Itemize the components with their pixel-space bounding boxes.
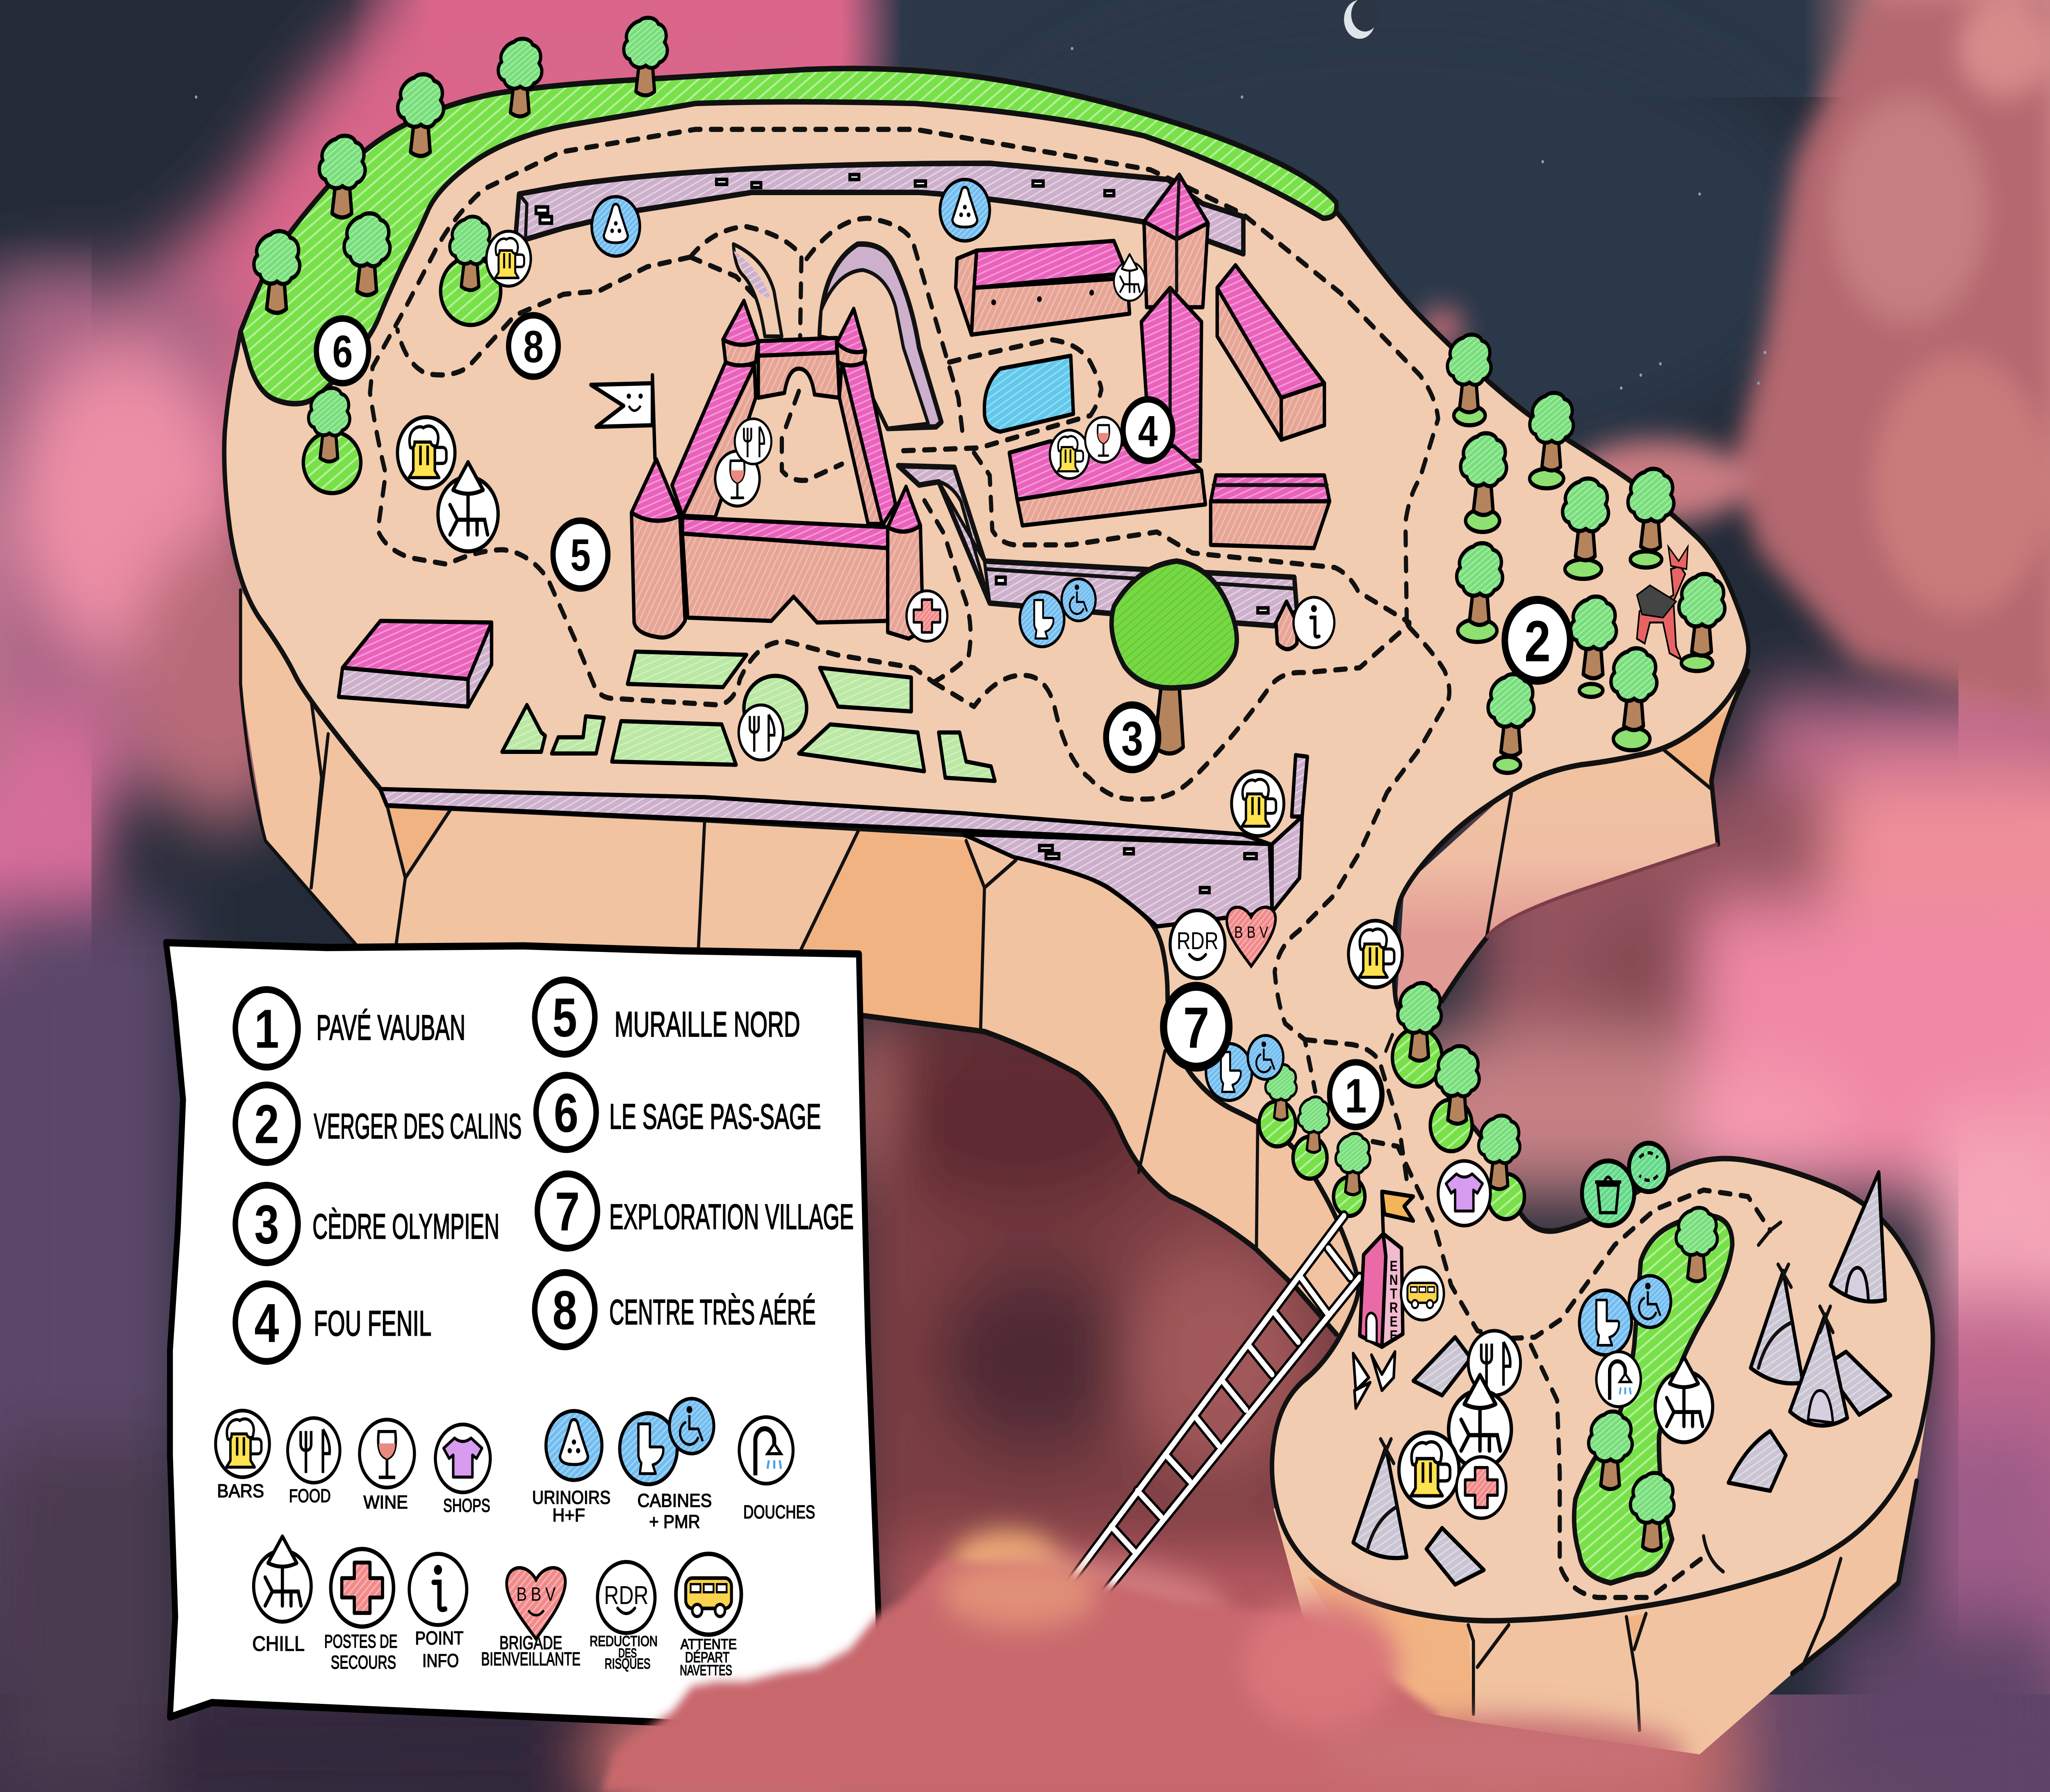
legend entry 7: EXPLORATION VILLAGE: [609, 1197, 854, 1236]
cliff: outline: [861, 1016, 1336, 1334]
legend entry 7: 7: [555, 1181, 580, 1242]
lower island green blob: [1574, 1216, 1732, 1583]
legend icon: urinals: URINOIRS: [532, 1487, 610, 1508]
legend icon: BBV: BIENVEILLANTE: [481, 1649, 581, 1669]
curved wall right: [820, 244, 941, 428]
stars: [195, 47, 1766, 389]
map marker 3: [1106, 705, 1158, 770]
legend entry 6: [536, 1075, 821, 1150]
legend icon: BBV: BBV: [517, 1584, 556, 1605]
foreground clouds bottom centre: [941, 1557, 1687, 1792]
map icon: accessible camp: [1629, 1276, 1671, 1327]
map marker 2: [1505, 600, 1570, 681]
legend entry 6: LE SAGE PAS-SAGE: [609, 1097, 821, 1136]
legend icon: food: FOOD: [289, 1485, 331, 1506]
ladder: [1068, 1216, 1360, 1604]
legend icon: shuttle: [676, 1554, 741, 1678]
orchard trees: [1447, 335, 1725, 773]
legend icon: info: POINT: [415, 1628, 463, 1649]
map icon: beer south wall: [1232, 771, 1284, 836]
map icon: chill west: [438, 462, 498, 551]
legend icon: showers: DOUCHES: [743, 1502, 815, 1522]
legend icon: RDR: DES: [618, 1646, 637, 1660]
curved wall left: [733, 244, 782, 336]
legend entry 2: VERGER DES CALINS: [314, 1106, 522, 1146]
legend entry 1: 1: [254, 998, 279, 1059]
cliff: lower island: [1273, 1374, 1932, 1754]
map marker 8: [508, 315, 558, 377]
legend icon: cabins and accessible: CABINES: [638, 1490, 712, 1511]
map marker 1: 1: [1345, 1069, 1367, 1123]
background: sky lighter tone right: [941, 8, 1830, 477]
map icon: BBV heart: BBV: [1234, 923, 1268, 941]
entrance label: R: [1389, 1300, 1398, 1316]
map icon: chill camp: [1449, 1375, 1511, 1468]
map icon: beer camp: [1399, 1432, 1459, 1507]
castle flag: [591, 375, 655, 459]
foreground cloud covering the legend corner: [601, 1560, 1438, 1792]
legend entry 8: 8: [552, 1280, 577, 1341]
background: bright cloud detail: [615, 0, 2050, 1790]
legend entry 1: PAVÉ VAUBAN: [317, 1008, 465, 1047]
map icon: beer west: [397, 417, 455, 488]
map icon: wine castle: [715, 451, 760, 506]
map icon: recycling: [1629, 1143, 1668, 1192]
barn: long building: [956, 241, 1130, 335]
map marker 2: 2: [1524, 609, 1551, 674]
tipi north-east: [1830, 1172, 1885, 1302]
tent small east: [1729, 1431, 1786, 1491]
cliff: right side of orchard: [1396, 671, 1748, 1011]
legend entry 2: 2: [254, 1093, 279, 1155]
legend icon: urinals: H+F: [552, 1505, 585, 1526]
map icon: shower camp: [1596, 1352, 1641, 1407]
wall bricks: [536, 175, 1114, 223]
legend icon: chill: [252, 1536, 311, 1655]
island top surface: [224, 68, 1933, 1621]
map icon: wine farm: [1085, 417, 1122, 462]
small tower near info: [1276, 601, 1297, 649]
back right tower: [837, 309, 866, 352]
tent south-west: [1426, 1528, 1484, 1585]
gardens: [502, 651, 995, 781]
map icon: first aid castle: [907, 591, 948, 641]
legend icon: shops: SHOPS: [443, 1495, 490, 1516]
legend sheet: [166, 943, 879, 1738]
legend entry 5: 5: [552, 987, 577, 1048]
legend entry 7: [538, 1174, 854, 1248]
barn: tall tower: [1144, 175, 1208, 307]
legend icon: first aid: SECOURS: [331, 1652, 396, 1673]
dashed paths: outer loop and alleys: [370, 130, 1781, 1598]
map icon: first aid camp: [1456, 1457, 1506, 1518]
legend icon: chill: CHILL: [252, 1632, 305, 1655]
panel: legend: [166, 943, 879, 1738]
map icon: info: [1294, 597, 1334, 648]
green hillside band: [241, 68, 1337, 404]
entrance label: E: [1390, 1314, 1398, 1330]
cliff: main island: [241, 590, 1362, 1358]
map icon: BBV heart: [1227, 907, 1276, 966]
map marker 7: 7: [1183, 995, 1210, 1060]
map marker 1: [1330, 1062, 1382, 1127]
map icon: shuttle stop: [1401, 1267, 1444, 1320]
legend icon: wine: [360, 1420, 415, 1513]
legend entry 6: 6: [554, 1082, 579, 1143]
map icon: chill farm: [1114, 254, 1145, 301]
map icon: accessible wall: [1061, 579, 1096, 621]
legend icon: shuttle: DÉPART: [685, 1649, 729, 1665]
map icon: food gardens: [739, 705, 783, 760]
legend icon: food: [288, 1418, 340, 1506]
left curtain wall: [672, 362, 754, 516]
entrance label: N: [1389, 1272, 1398, 1288]
legend entry 1: [235, 990, 465, 1067]
map icon: RDR: [1170, 910, 1225, 978]
lower long wall: [898, 466, 1297, 626]
map icon: chill meadow: [1655, 1357, 1713, 1442]
legend icon: BBV: BRIGADE: [499, 1633, 562, 1653]
tipi west: [1353, 1439, 1407, 1558]
legend icon: bars: BARS: [217, 1480, 264, 1501]
map icon: urinals east: [940, 180, 990, 241]
legend entry 3: [235, 1185, 499, 1263]
barn: lower right: [1211, 476, 1330, 548]
tipi centre: [1751, 1264, 1803, 1383]
cliff: crack lines: [241, 590, 1258, 1250]
legend icon: shuttle: ATTENTE: [681, 1636, 737, 1652]
tents: [1353, 1172, 1891, 1585]
legend icon: cabins and accessible: [620, 1398, 714, 1532]
map icon: toilets neck: [1206, 1043, 1252, 1100]
north wall: [515, 163, 1244, 254]
map icon: toilets wall: [1020, 592, 1064, 647]
legend entry 8: CENTRE TRÈS AÉRÉ: [609, 1292, 816, 1332]
barn: slanted building: [1217, 265, 1324, 440]
legend icon: wine: WINE: [363, 1492, 408, 1513]
map icon: beer north: [486, 231, 531, 286]
barn: west building: [339, 621, 492, 706]
map icon: beer farm: [1050, 430, 1089, 478]
legend icon: RDR: [590, 1562, 658, 1672]
entrance label: T: [1390, 1286, 1397, 1302]
barn: L-shaped roof with lower wing: [1009, 288, 1205, 526]
deer: [1637, 546, 1688, 660]
map marker 3: 3: [1121, 711, 1143, 765]
legend icon: info: [409, 1554, 467, 1671]
entrance label: E: [1390, 1327, 1398, 1343]
legend icon: info: INFO: [422, 1650, 459, 1671]
legend icon: first aid: POSTES DE: [324, 1631, 397, 1652]
back left tower: [723, 301, 758, 345]
legend icon: urinals: [532, 1411, 610, 1526]
legend entry 4: 4: [254, 1292, 279, 1354]
big cedar tree: [1112, 561, 1237, 754]
tent behind tipi: [1824, 1352, 1891, 1415]
map marker 5: [553, 521, 608, 589]
map icon: food castle: [735, 419, 771, 464]
map icon: food camp: [1468, 1331, 1521, 1396]
map icon: shop: [1438, 1161, 1490, 1225]
right front tower: [888, 526, 923, 639]
cliff: darker facets: [387, 805, 984, 1031]
castle: [591, 244, 941, 639]
legend entry 2: [235, 1085, 522, 1163]
map marker 6: 6: [333, 326, 353, 377]
moon: [1344, 0, 1379, 39]
trees: neck: [1259, 983, 1524, 1219]
map marker 4: 4: [1138, 407, 1158, 456]
map marker 7: [1164, 986, 1229, 1067]
legend icon: RDR: RISQUES: [605, 1655, 650, 1672]
legend icon: RDR: REDUCTION: [590, 1633, 658, 1649]
front wall: [683, 533, 888, 622]
trees: north hill: [254, 18, 667, 313]
legend icon: shops: [435, 1425, 490, 1516]
map marker 8: 8: [523, 321, 544, 372]
legend icon: RDR: RDR: [604, 1581, 649, 1610]
legend icon: first aid: [324, 1549, 397, 1673]
legend entry 4: FOU FENIL: [314, 1304, 431, 1343]
legend entry 8: [535, 1273, 816, 1347]
right curtain wall: [839, 362, 882, 524]
map marker 4: [1123, 399, 1173, 461]
legend icon: BBV: [481, 1568, 581, 1669]
legend icon: shuttle: NAVETTES: [680, 1662, 732, 1678]
legend entry 3: CÈDRE OLYMPIEN: [312, 1207, 499, 1246]
south wall: [380, 755, 1307, 927]
legend entry 3: 3: [254, 1194, 279, 1255]
map marker 6: [317, 319, 369, 383]
legend icon: cabins and accessible: + PMR: [649, 1511, 700, 1532]
legend entry 5: MURAILLE NORD: [615, 1004, 800, 1044]
map icon: accessible neck: [1248, 1036, 1283, 1079]
entrance label: E: [1390, 1258, 1398, 1274]
map marker 5: 5: [570, 530, 591, 581]
tent north-west: [1413, 1337, 1471, 1396]
tipi east: [1790, 1307, 1847, 1425]
map icon: trash: [1582, 1161, 1634, 1225]
map icon: beer neck: [1348, 921, 1402, 987]
gatehouse: [758, 341, 839, 398]
pool: [984, 356, 1073, 432]
map icon: RDR: RDR: [1177, 927, 1219, 954]
map icon: toilets camp: [1579, 1290, 1632, 1355]
legend entry 4: [235, 1284, 431, 1362]
legend icon: bars: [216, 1411, 269, 1501]
map icon: urinals west: [592, 197, 640, 256]
bunting decoration: [1353, 1352, 1395, 1408]
legend entry 5: [535, 980, 800, 1054]
entrance tower: [1360, 1192, 1413, 1347]
left front tower: [631, 512, 685, 638]
trees: lower island: [1589, 1208, 1717, 1551]
tree islets west: [303, 216, 501, 493]
legend icon: showers: [739, 1417, 815, 1522]
